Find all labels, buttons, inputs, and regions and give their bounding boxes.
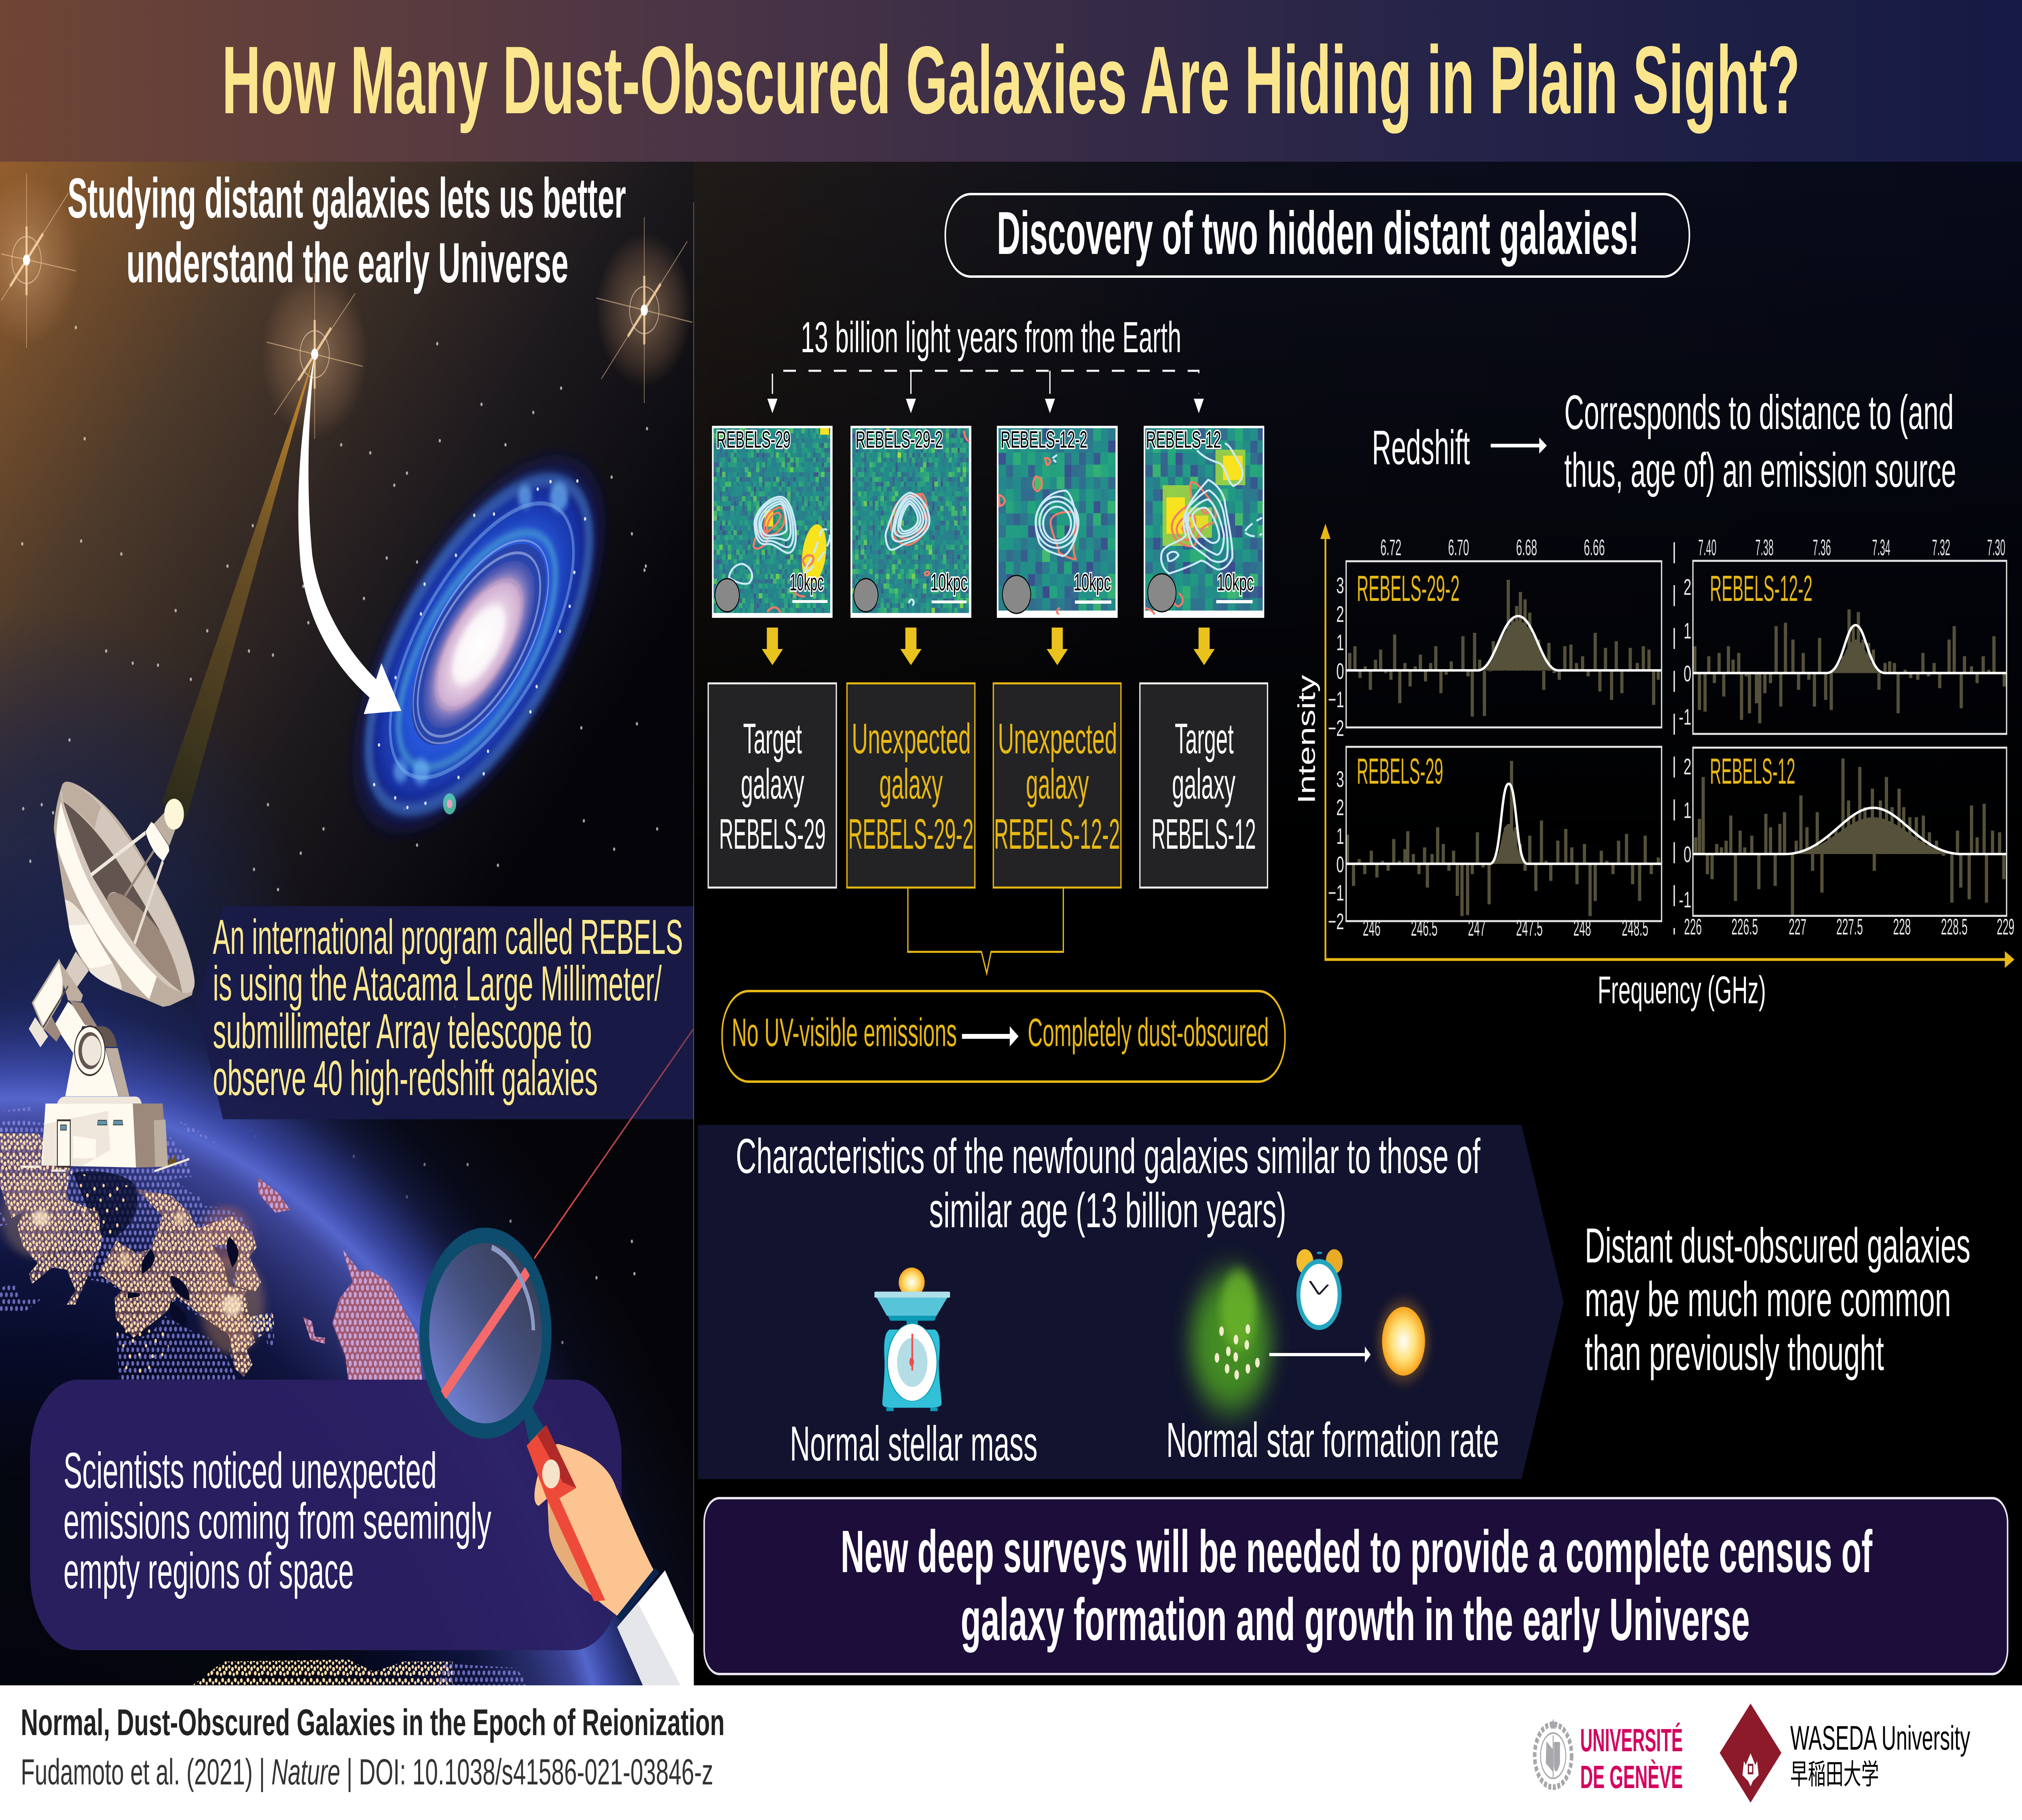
top axis labels: 6.70 <box>1448 535 1469 560</box>
result box: target galaxy REBELS-12 <box>1140 683 1267 888</box>
text panel: unexpected emissions: emissions coming from seemingly <box>63 1493 491 1550</box>
yellow down arrows <box>762 628 1215 665</box>
spectrum: REBELS-12 <box>1693 759 2007 916</box>
spectrum: REBELS-29 <box>1346 761 1662 916</box>
top axis labels <box>1380 535 2005 560</box>
result box: unexpected galaxy REBELS-29-2: Unexpected <box>852 714 971 763</box>
conclusion text: more common: may be much more common <box>1585 1272 1951 1327</box>
icon: green cloud forming stars <box>1191 1270 1271 1411</box>
redshift explanation: Redshift <box>1372 421 1470 475</box>
map: REBELS-12-2: REBELS-12-2 <box>1000 427 1087 453</box>
title banner <box>0 0 2022 162</box>
star flare centre <box>262 269 368 439</box>
frequency axis tick labels: 227.5 <box>1836 914 1863 939</box>
continent: southern landmass <box>116 1316 237 1380</box>
continent: islands <box>258 1178 325 1344</box>
intensity axis tick labels: 0 <box>1336 659 1344 684</box>
result box: target galaxy REBELS-29 <box>708 683 836 888</box>
gold bracket <box>908 888 1063 973</box>
intensity axis tick labels: 1 <box>1336 630 1344 655</box>
logo: University of Geneva name: DE GENÈVE <box>1580 1759 1683 1795</box>
dashed separator <box>1673 542 1675 934</box>
panel frames <box>1346 561 2007 921</box>
logo: Waseda name: WASEDA University <box>1790 1719 1970 1757</box>
text panel: REBELS program <box>196 906 694 1119</box>
laser line <box>534 1029 693 1258</box>
top axis labels: 6.68 <box>1516 535 1537 560</box>
telescope dish <box>54 782 195 1007</box>
intensity axis tick labels: 2 <box>1336 602 1344 627</box>
map: REBELS-29-2: REBELS-29-2 <box>856 427 943 453</box>
result box: target galaxy REBELS-12: Target <box>1175 714 1234 763</box>
result box: target galaxy REBELS-12: REBELS-12 <box>1152 810 1256 858</box>
callout: new deep surveys: galaxy formation and growth in the early Universe <box>961 1586 1750 1653</box>
result box: unexpected galaxy REBELS-29-2: REBELS-29-2 <box>848 810 973 858</box>
panel: left illustration <box>0 162 694 1691</box>
result box: unexpected galaxy REBELS-12-2: galaxy <box>1026 760 1089 808</box>
star flare right <box>596 217 692 403</box>
frequency axis tick labels: 227 <box>1789 914 1806 939</box>
frequency axis tick labels: 226 <box>1684 914 1702 939</box>
conclusion pill: dust-obscured <box>722 991 1285 1082</box>
continent: main landmass <box>0 1119 261 1377</box>
intensity axis tick labels: -1 <box>1679 887 1692 912</box>
map: REBELS-12 <box>1144 426 1264 618</box>
intensity axis tick labels: 3 <box>1336 767 1344 792</box>
distance label with dashed bracket <box>768 313 1204 413</box>
result box: target galaxy REBELS-29: Target <box>743 714 802 763</box>
icon: newly formed star <box>1378 1301 1429 1382</box>
text panel: unexpected emissions <box>30 1380 622 1650</box>
result box: unexpected galaxy REBELS-29-2: galaxy <box>879 760 943 808</box>
intensity axis tick labels: -1 <box>1679 704 1692 729</box>
text panel: unexpected emissions: Scientists noticed unexpected <box>63 1443 437 1499</box>
curved white arrow <box>298 354 401 714</box>
frequency axis tick labels: 229 <box>1997 914 2014 939</box>
conclusion pill: dust-obscured: No UV-visible emissions <box>732 1010 957 1055</box>
axis title: frequency: Frequency (GHz) <box>1598 968 1766 1011</box>
frequency axis tick labels: 247.5 <box>1516 915 1543 941</box>
top axis labels: 6.66 <box>1584 535 1605 560</box>
logo: University of Geneva name: UNIVERSITÉ <box>1580 1722 1683 1759</box>
text panel: REBELS program: An international program called REBELS <box>213 909 683 964</box>
logo: Waseda name <box>1790 1719 1970 1790</box>
spectrum: REBELS-12-2 <box>1693 609 2007 723</box>
intensity axis tick labels: 1 <box>1336 824 1344 849</box>
top axis labels: 7.30 <box>1987 535 2005 560</box>
top axis labels: 7.38 <box>1756 535 1774 560</box>
intensity axis tick labels: 2 <box>1684 754 1691 779</box>
result box: unexpected galaxy REBELS-12-2 <box>993 683 1121 888</box>
map: REBELS-29: REBELS-29 <box>716 427 791 453</box>
text panel: REBELS program: submillimeter Array telescope to <box>213 1004 592 1059</box>
label: normal star formation rate: Normal star formation rate <box>1166 1412 1499 1467</box>
spectrum name labels: REBELS-29 <box>1357 750 1443 791</box>
telescope beam <box>162 354 315 821</box>
map: REBELS-29-2: 10kpc <box>931 569 967 596</box>
frequency axis tick labels: 228.5 <box>1941 914 1967 939</box>
spectrum: REBELS-29-2 <box>1346 580 1662 717</box>
panel: characteristics arrow <box>698 1125 1564 1479</box>
callout: new deep surveys: New deep surveys will be needed to provide a complete census of <box>841 1518 1873 1585</box>
result box: target galaxy REBELS-29: REBELS-29 <box>719 810 826 858</box>
map: REBELS-29-2 <box>850 426 971 618</box>
frequency axis tick labels: 248 <box>1574 915 1591 941</box>
city lights below callout <box>186 1659 453 1691</box>
citation reference: Fudamoto et al. (2021) | Nature | DOI: 10.1038/s41586-021-03846-z <box>21 1751 713 1792</box>
result box: unexpected galaxy REBELS-12-2: REBELS-12-2 <box>994 810 1120 858</box>
result box: target galaxy REBELS-12: galaxy <box>1172 760 1235 808</box>
logo: Waseda name: 早稲田大学 <box>1790 1759 1879 1790</box>
frequency axis tick labels: 246 <box>1363 915 1381 941</box>
intensity axis tick labels: −2 <box>1328 716 1344 741</box>
intensity axis tick labels: −1 <box>1328 880 1344 905</box>
result box: target galaxy REBELS-29: galaxy <box>741 760 804 808</box>
intensity axis tick labels: 1 <box>1684 618 1691 643</box>
label: normal stellar mass: Normal stellar mass <box>790 1416 1038 1471</box>
intensity axis tick labels: −1 <box>1328 687 1344 712</box>
hand holding magnifier <box>522 1406 694 1685</box>
heading: studying distant galaxies <box>68 166 626 294</box>
intensity axis tick labels: −2 <box>1328 909 1344 934</box>
map: REBELS-12-2: 10kpc <box>1074 569 1111 596</box>
magnifying glass <box>424 1235 547 1431</box>
earth with city lights <box>0 849 694 1691</box>
top axis labels: 7.40 <box>1698 535 1716 560</box>
citation title: Normal, Dust-Obscured Galaxies in the Epoch of Reionization <box>21 1702 725 1743</box>
title: How Many Dust-Obscured Galaxies Are Hiding in Plain Sight? <box>222 26 1800 134</box>
callout: new deep surveys <box>704 1498 2007 1674</box>
axis title: intensity: Intensity <box>1293 675 1320 804</box>
redshift explanation: Corresponds to distance to (and <box>1564 385 1954 440</box>
background stars <box>22 328 657 1342</box>
conclusion text: more common: Distant dust-obscured galaxies <box>1585 1218 1970 1273</box>
redshift explanation <box>1372 385 1956 497</box>
footer <box>0 1685 2022 1820</box>
frequency axis tick labels: 228 <box>1893 914 1911 939</box>
top axis labels: 6.72 <box>1380 535 1401 560</box>
radio telescope <box>20 782 195 1171</box>
star flare left <box>0 174 80 348</box>
top axis labels: 7.32 <box>1932 535 1950 560</box>
result box: unexpected galaxy REBELS-12-2: Unexpected <box>998 714 1117 763</box>
galaxy <box>310 384 648 905</box>
text panel: unexpected emissions: empty regions of space <box>63 1543 354 1600</box>
redshift explanation: thus, age of) an emission source <box>1564 443 1956 497</box>
spectrum name labels: REBELS-29-2 <box>1357 568 1459 609</box>
arrow: star formation <box>1269 1347 1371 1363</box>
icon: alarm clock <box>1297 1249 1343 1330</box>
text panel: REBELS program: is using the Atacama Large Millimeter/ <box>213 956 662 1011</box>
logo: University of Geneva name <box>1580 1722 1683 1795</box>
result box: unexpected galaxy REBELS-29-2 <box>847 683 975 888</box>
conclusion text: more common <box>1585 1218 1970 1380</box>
logo: Waseda diamond emblem <box>1720 1704 1781 1803</box>
icon: weighing scale with star <box>874 1268 950 1411</box>
discovery heading pill: Discovery of two hidden distant galaxies! <box>997 199 1639 267</box>
observatory building <box>20 1097 189 1171</box>
map: REBELS-12: REBELS-12 <box>1146 427 1221 453</box>
spectra chart <box>1293 524 2014 1011</box>
intensity axis tick labels: 3 <box>1336 573 1344 598</box>
text panel: REBELS program: observe 40 high-redshift galaxies <box>213 1051 598 1106</box>
intensity axis tick labels: 0 <box>1336 852 1344 877</box>
map: REBELS-12: 10kpc <box>1217 569 1254 596</box>
map: REBELS-12-2 <box>997 426 1118 618</box>
spectrum name labels: REBELS-12-2 <box>1710 568 1813 609</box>
heading: studying distant galaxies: understand the early Universe <box>126 231 569 294</box>
intensity axis tick labels: 2 <box>1336 795 1344 820</box>
distance label with dashed bracket: 13 billion light years from the Earth <box>801 313 1181 362</box>
panel: characteristics arrow: similar age (13 billion years) <box>929 1183 1286 1238</box>
intensity axis tick labels: 0 <box>1684 842 1691 867</box>
top axis labels: 7.36 <box>1813 535 1831 560</box>
gold axes <box>1320 524 2014 968</box>
conclusion pill: dust-obscured: Completely dust-obscured <box>1028 1010 1269 1055</box>
map: REBELS-29 <box>712 426 833 618</box>
frequency axis tick labels: 246.5 <box>1411 915 1438 941</box>
panel divider <box>693 202 694 1685</box>
logo: University of Geneva seal <box>1535 1719 1571 1787</box>
intensity axis tick labels: 0 <box>1684 661 1691 686</box>
frequency axis tick labels: 226.5 <box>1732 914 1758 939</box>
intensity axis tick labels: 2 <box>1684 575 1691 600</box>
spectra bars and fits <box>1346 580 2007 916</box>
conclusion text: more common: than previously thought <box>1585 1325 1884 1380</box>
intensity axis tick labels: 1 <box>1684 798 1691 823</box>
spectrum name labels <box>1357 568 1813 791</box>
top axis labels: 7.34 <box>1872 535 1890 560</box>
frequency axis tick labels: 248.5 <box>1622 915 1648 941</box>
telescope mount <box>29 951 129 1096</box>
map: REBELS-29: 10kpc <box>789 569 824 596</box>
panel: characteristics arrow: Characteristics of the newfound galaxies similar to those of <box>736 1129 1481 1184</box>
heading: studying distant galaxies: Studying distant galaxies lets us better <box>68 166 626 230</box>
frequency axis tick labels: 247 <box>1468 915 1486 941</box>
spectrum name labels: REBELS-12 <box>1710 750 1795 791</box>
intensity axis tick labels <box>1328 573 1691 934</box>
right panel background <box>694 162 2022 1685</box>
frequency axis tick labels <box>1363 914 2014 941</box>
continent: eastern landmass <box>332 1249 422 1380</box>
